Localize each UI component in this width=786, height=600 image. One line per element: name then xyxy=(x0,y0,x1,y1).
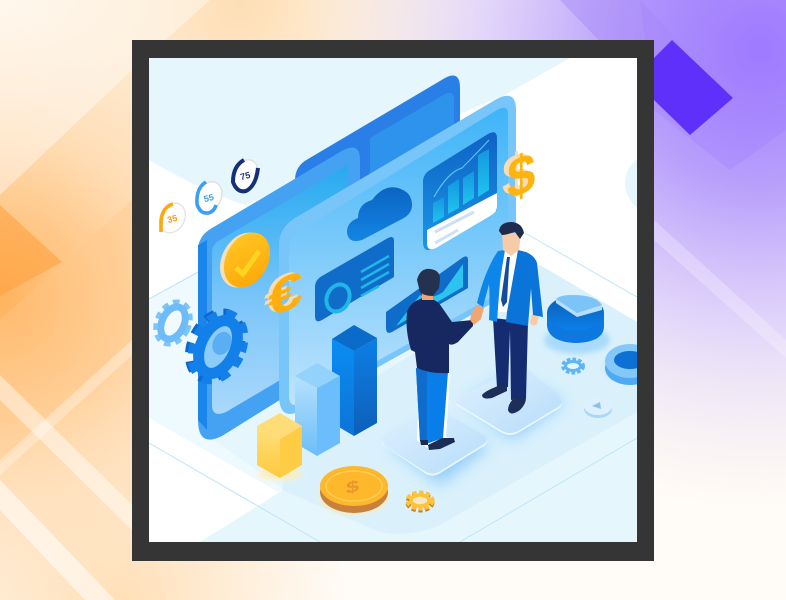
illustration panel xyxy=(149,58,685,542)
area chart card xyxy=(386,256,468,333)
progress ring 55 xyxy=(195,180,223,215)
right platform xyxy=(456,368,565,440)
person: man in navy jacket xyxy=(406,269,473,450)
blue trousers xyxy=(416,368,448,443)
front shoe xyxy=(428,438,455,450)
icon: cloud xyxy=(347,187,412,241)
jacket left side xyxy=(477,250,505,322)
icon: euro sign xyxy=(264,272,302,313)
medium light 3D bar xyxy=(295,363,340,456)
front dashboard panel xyxy=(279,96,516,414)
progress ring 55: 55 xyxy=(203,192,215,204)
progress ring 75: 75 xyxy=(239,170,251,182)
white outline xyxy=(418,374,455,447)
tall dark 3D bar xyxy=(332,325,377,436)
left hand xyxy=(470,305,484,325)
icon: dollar sign: $ xyxy=(507,139,535,212)
right shoe xyxy=(508,398,526,414)
navy trousers xyxy=(493,318,528,400)
icon: small gold gear xyxy=(408,493,432,510)
progress ring 35: 35 xyxy=(166,213,178,225)
progress ring 35 xyxy=(159,202,186,234)
icon: check coin xyxy=(220,232,270,288)
tie xyxy=(501,257,510,307)
dark picture frame xyxy=(132,40,654,561)
icon: euro sign: € xyxy=(264,257,299,329)
donut stat card xyxy=(315,237,394,321)
back shoe xyxy=(420,440,428,445)
bar chart card xyxy=(423,132,497,250)
face xyxy=(502,233,521,256)
middle dashboard panel xyxy=(198,148,360,440)
person: man in blue suit xyxy=(470,222,543,414)
icon: dollar coin: $ xyxy=(346,476,360,498)
shirt xyxy=(497,250,519,312)
floor background shapes xyxy=(149,58,685,542)
icon: small blue gear xyxy=(563,360,583,372)
icon: dark gear xyxy=(185,308,248,384)
icon: 3D pie chart xyxy=(544,295,610,354)
hair xyxy=(499,222,524,239)
neck xyxy=(422,294,433,300)
hair xyxy=(417,269,440,296)
right hand xyxy=(530,314,539,326)
short yellow 3D bar xyxy=(257,413,302,480)
icon: 3D ring xyxy=(605,344,637,385)
progress ring 75 xyxy=(231,158,260,194)
back dashboard panel xyxy=(295,76,460,180)
jacket right side xyxy=(506,250,543,326)
left shoe xyxy=(482,386,507,399)
left platform xyxy=(381,409,490,485)
icon: triangle button xyxy=(584,402,612,418)
icon: dollar sign xyxy=(502,150,535,200)
icon: euro sign: € xyxy=(268,258,303,330)
navy jacket xyxy=(406,298,473,373)
icon: light gear xyxy=(153,300,193,346)
icon: dollar sign: $ xyxy=(502,137,530,210)
icon: dollar coin xyxy=(320,466,388,514)
